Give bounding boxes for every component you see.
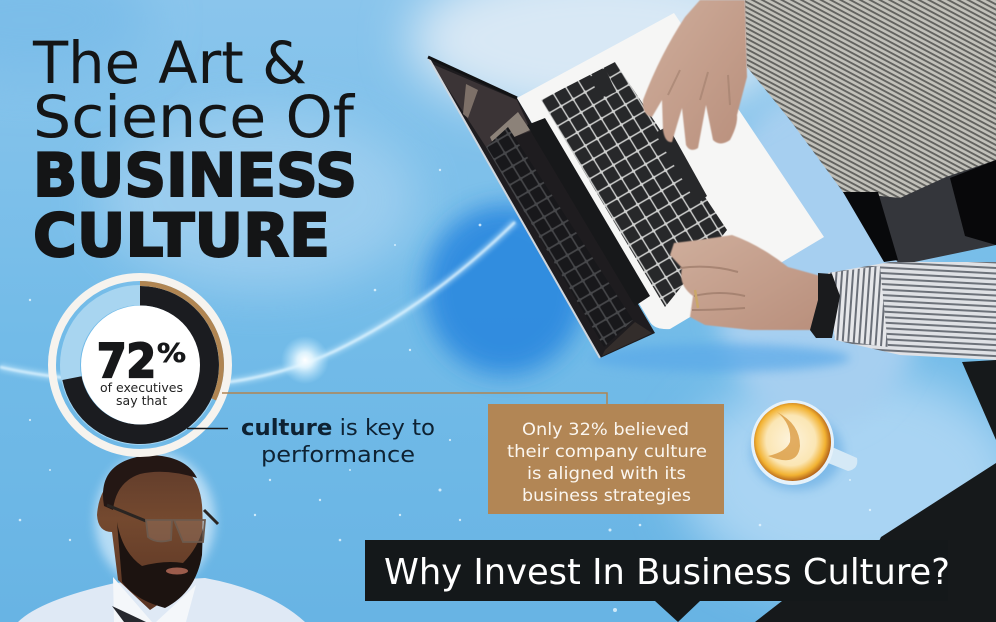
hair — [103, 455, 197, 510]
bottom hand — [670, 235, 824, 330]
glasses — [107, 505, 218, 542]
title: Science Of — [33, 83, 356, 151]
caption: say that — [116, 394, 167, 408]
top hand — [643, 0, 747, 150]
section banner — [365, 540, 950, 622]
coffee cup — [751, 400, 857, 490]
callout: brown box: their company culture — [507, 442, 707, 462]
big number: 72 — [97, 334, 156, 388]
shirt and shoulders — [18, 578, 305, 622]
brown 32 percent arc — [140, 281, 224, 400]
title: BUSINESS — [33, 141, 357, 211]
keyboard — [541, 62, 727, 307]
laptop lid — [428, 57, 655, 358]
callout: culture is key — [241, 416, 435, 468]
black corner shapes — [755, 360, 996, 622]
title: The Art & — [32, 29, 307, 97]
collar and tie — [113, 577, 196, 622]
title — [32, 29, 357, 271]
watch — [810, 273, 840, 338]
big number: % — [157, 339, 186, 369]
laptop — [428, 13, 824, 358]
callout: brown box: business strategies — [522, 486, 691, 506]
callout: brown box: Only 32% believed — [522, 420, 689, 440]
black 72 percent arc — [62, 286, 219, 444]
panel: man portrait — [18, 452, 305, 622]
section banner: Why Invest In Business Culture? — [384, 552, 950, 593]
neck and face — [97, 458, 203, 610]
callout: brown box: is aligned with its — [527, 464, 686, 484]
callout: culture is key: culture is key to — [241, 416, 435, 441]
planet arc with lens flare — [0, 222, 515, 386]
laptop deck — [517, 13, 824, 329]
sparkles — [19, 169, 871, 612]
hinge band — [527, 118, 650, 306]
caption — [100, 381, 183, 408]
black connector line — [187, 428, 228, 430]
beard — [117, 522, 203, 608]
caption: of executives — [100, 381, 183, 395]
donut chart: 72 percent — [52, 277, 228, 453]
lips — [166, 568, 188, 574]
brown connector line — [222, 393, 607, 404]
callout: brown box — [488, 404, 724, 514]
shirt — [745, 0, 996, 265]
sleeve — [828, 262, 996, 360]
title: CULTURE — [33, 201, 330, 271]
callout: culture is key: performance — [261, 443, 415, 468]
